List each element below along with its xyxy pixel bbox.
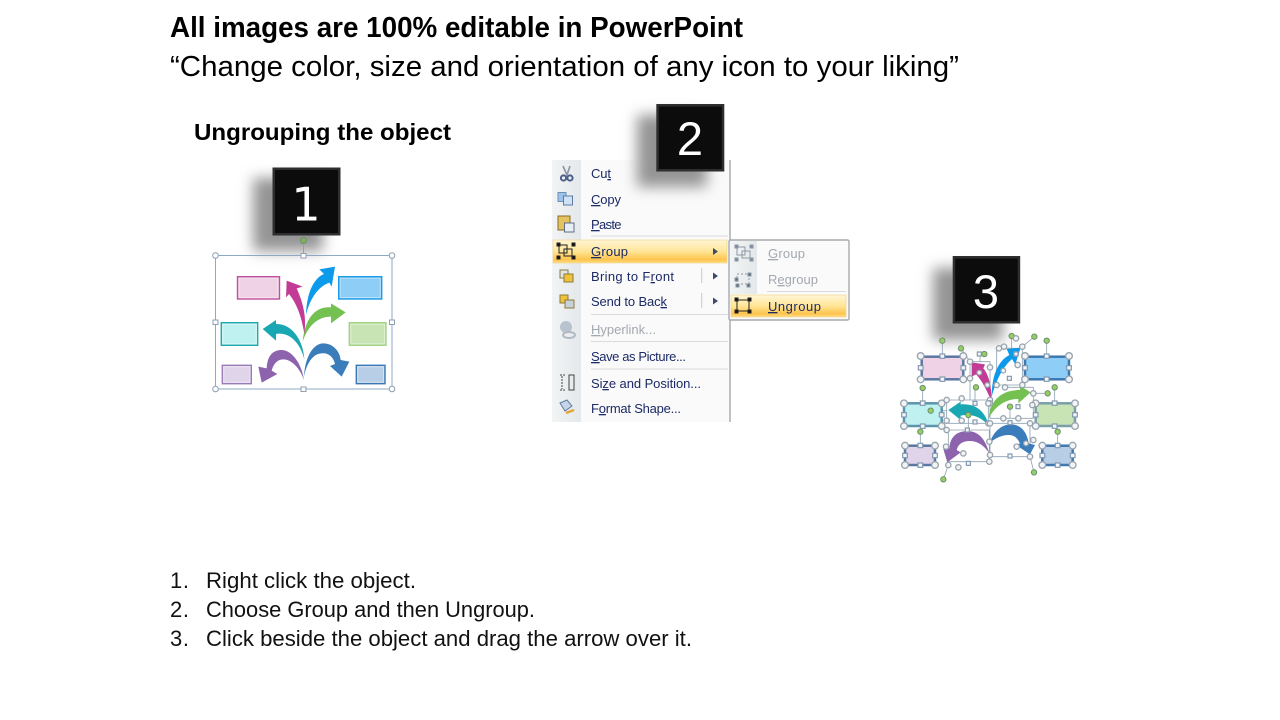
menu labels: Hyperlink... [591, 322, 656, 337]
step 2: 2. [170, 597, 189, 622]
step 1: Right click the object. [206, 568, 416, 593]
badge 1 [272, 168, 340, 236]
menu labels: Send to Back [591, 294, 668, 309]
heading: editable: All images are 100% editable in PowerPoint [170, 12, 743, 44]
menu labels: Save as Picture... [591, 349, 686, 364]
badge 1 shadow [253, 178, 323, 251]
title [170, 12, 959, 83]
icon: bring to front [560, 270, 573, 282]
ungrouped label boxes [904, 357, 1075, 465]
figure 3: ungrouped object [901, 256, 1078, 482]
main menu panel [552, 160, 730, 422]
submenu labels: Group [768, 246, 805, 261]
icon: hyperlink [560, 321, 575, 338]
selection frame [213, 238, 395, 392]
submenu panel [729, 240, 849, 320]
icon: copy [558, 192, 572, 205]
badge 3: 3 [973, 265, 999, 318]
badge 2: 2 [677, 112, 703, 165]
subheading: change color: “Change color, size and orientation of any icon to your liking” [170, 51, 959, 83]
menu labels: Format Shape... [591, 401, 681, 416]
menu labels: Bring to Front [591, 269, 674, 284]
menu labels: Copy [591, 192, 622, 207]
selection handles [901, 333, 1078, 482]
submenu labels: Ungroup [768, 299, 821, 314]
badge 3 [953, 256, 1020, 324]
step 3: 3. [170, 626, 189, 651]
icon: scissors [561, 166, 573, 181]
badge 2 [656, 104, 724, 172]
menu labels: Cut [591, 166, 611, 181]
numbered instructions [170, 568, 692, 651]
menu labels: Size and Position... [591, 376, 701, 391]
icon: group [557, 243, 575, 259]
submenu arrows [702, 248, 718, 308]
figure 2: context menu [552, 104, 849, 422]
submenu row highlight: ungroup [731, 295, 846, 317]
menu labels: Paste [591, 217, 622, 232]
badge 1: 1 [291, 178, 321, 232]
figure 1: grouped object [213, 168, 395, 392]
menu labels [591, 166, 701, 416]
menu icons [557, 166, 575, 413]
submenu icons [735, 245, 753, 313]
arrows [258, 267, 349, 383]
label boxes [221, 277, 386, 384]
icon: paste [558, 216, 574, 232]
submenu labels [768, 246, 821, 314]
badge 2 shadow [637, 115, 707, 187]
step 3: Click beside the object and drag the arrow over it. [206, 626, 692, 651]
icon: send to back [560, 295, 574, 308]
badge 3 shadow [933, 268, 1003, 340]
step 2: Choose Group and then Ungroup. [206, 597, 535, 622]
menu labels: Group [591, 244, 628, 259]
highlighted menu row: group [553, 240, 727, 263]
ungrouped arrows [943, 348, 1035, 462]
heading: ungrouping the object: Ungrouping the object [194, 119, 451, 145]
arrow bounding boxes [931, 336, 1048, 479]
step 1: 1. [170, 568, 189, 593]
submenu labels: Regroup [768, 272, 818, 287]
icon: format shape [560, 400, 574, 413]
icon: size and position [560, 375, 574, 390]
